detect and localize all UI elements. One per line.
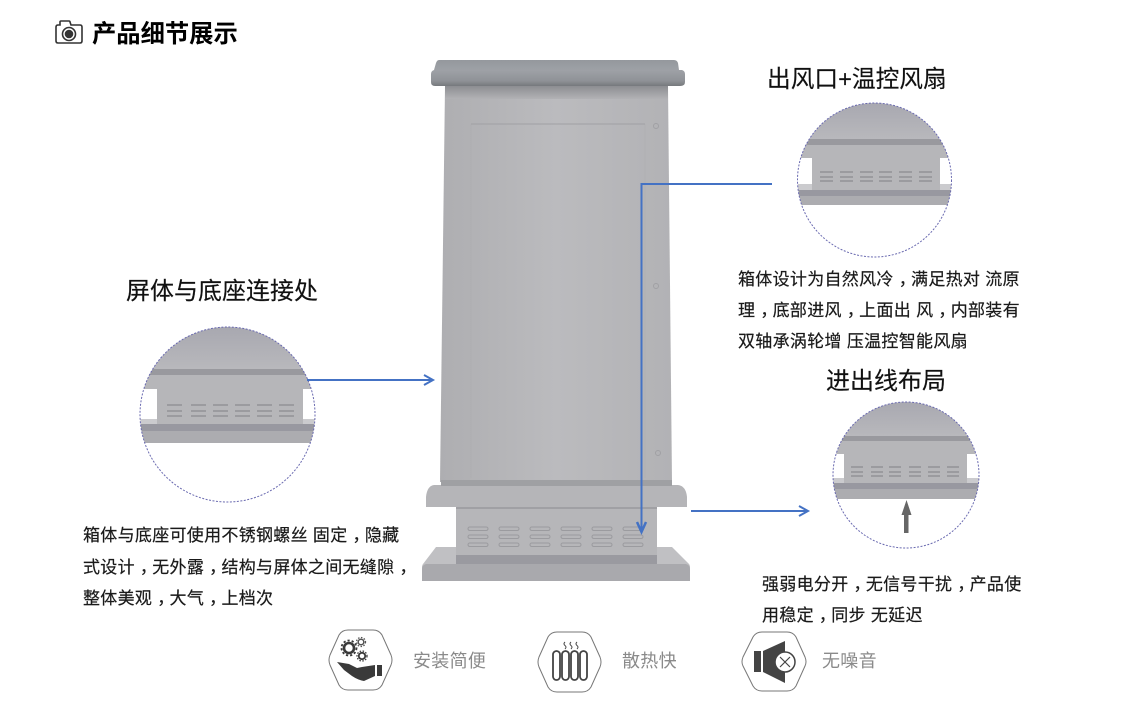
text: cable layout: 用稳定 ，同步 无延迟 — [762, 606, 923, 625]
label: fast heat dissipation: 散热快 — [622, 651, 677, 671]
feature: easy installation — [329, 630, 486, 690]
icon: muted speaker — [742, 632, 806, 691]
text: screen and base joint: 箱体与底座可使用不锈钢螺丝 固定 ，隐藏 — [83, 525, 399, 545]
feature: fast heat dissipation — [538, 632, 677, 692]
panel seam and screws — [471, 124, 660, 478]
text: screen and base joint: 式设计 ，无外露 ，结构与屏体之间无缝隙 ， — [83, 558, 417, 577]
detail circle: air outlet and fan — [797, 103, 953, 257]
text: screen and base joint — [83, 525, 417, 608]
kiosk shelf — [426, 485, 687, 507]
kiosk top cap — [431, 60, 685, 86]
kiosk base — [422, 547, 690, 581]
text: air outlet and fan — [738, 270, 1020, 351]
text: cable layout: 强弱电分开 ，无信号干扰 ，产品使 — [762, 574, 1022, 594]
heading: air outlet and fan: 出风口+温控风扇 — [767, 66, 947, 93]
text: air outlet and fan: 箱体设计为自然风冷 ，满足热对 流原 — [738, 270, 1020, 289]
arrow: joint to kiosk — [307, 375, 433, 385]
heading: cable layout: 进出线布局 — [826, 368, 946, 395]
detail circle: cable layout — [833, 401, 980, 548]
text: air outlet and fan: 双轴承涡轮增 压温控智能风扇 — [738, 332, 968, 351]
label: easy installation: 安装简便 — [413, 651, 486, 671]
label: no noise: 无噪音 — [822, 651, 877, 671]
title: 产品细节展示 — [92, 21, 238, 48]
arrow: cable entry — [902, 500, 912, 533]
kiosk lower box with vents — [456, 507, 657, 555]
heading: screen and base joint: 屏体与底座连接处 — [126, 278, 318, 305]
text: screen and base joint: 整体美观 ，大气 ，上档次 — [83, 589, 273, 608]
text: cable layout — [762, 574, 1022, 625]
icon: camera — [56, 21, 82, 43]
text: air outlet and fan: 理 ，底部进风 ，上面出 风 ，内部装有 — [738, 301, 1020, 320]
arrow: kiosk to cable layout — [691, 506, 808, 516]
icon: heater — [538, 632, 601, 692]
kiosk product illustration — [422, 60, 690, 581]
detail circle: screen and base joint — [140, 327, 316, 502]
feature: no noise — [742, 632, 877, 691]
icon: gears and hand — [329, 630, 392, 690]
kiosk body — [440, 86, 672, 482]
arrow: air outlet to vents — [637, 184, 772, 532]
